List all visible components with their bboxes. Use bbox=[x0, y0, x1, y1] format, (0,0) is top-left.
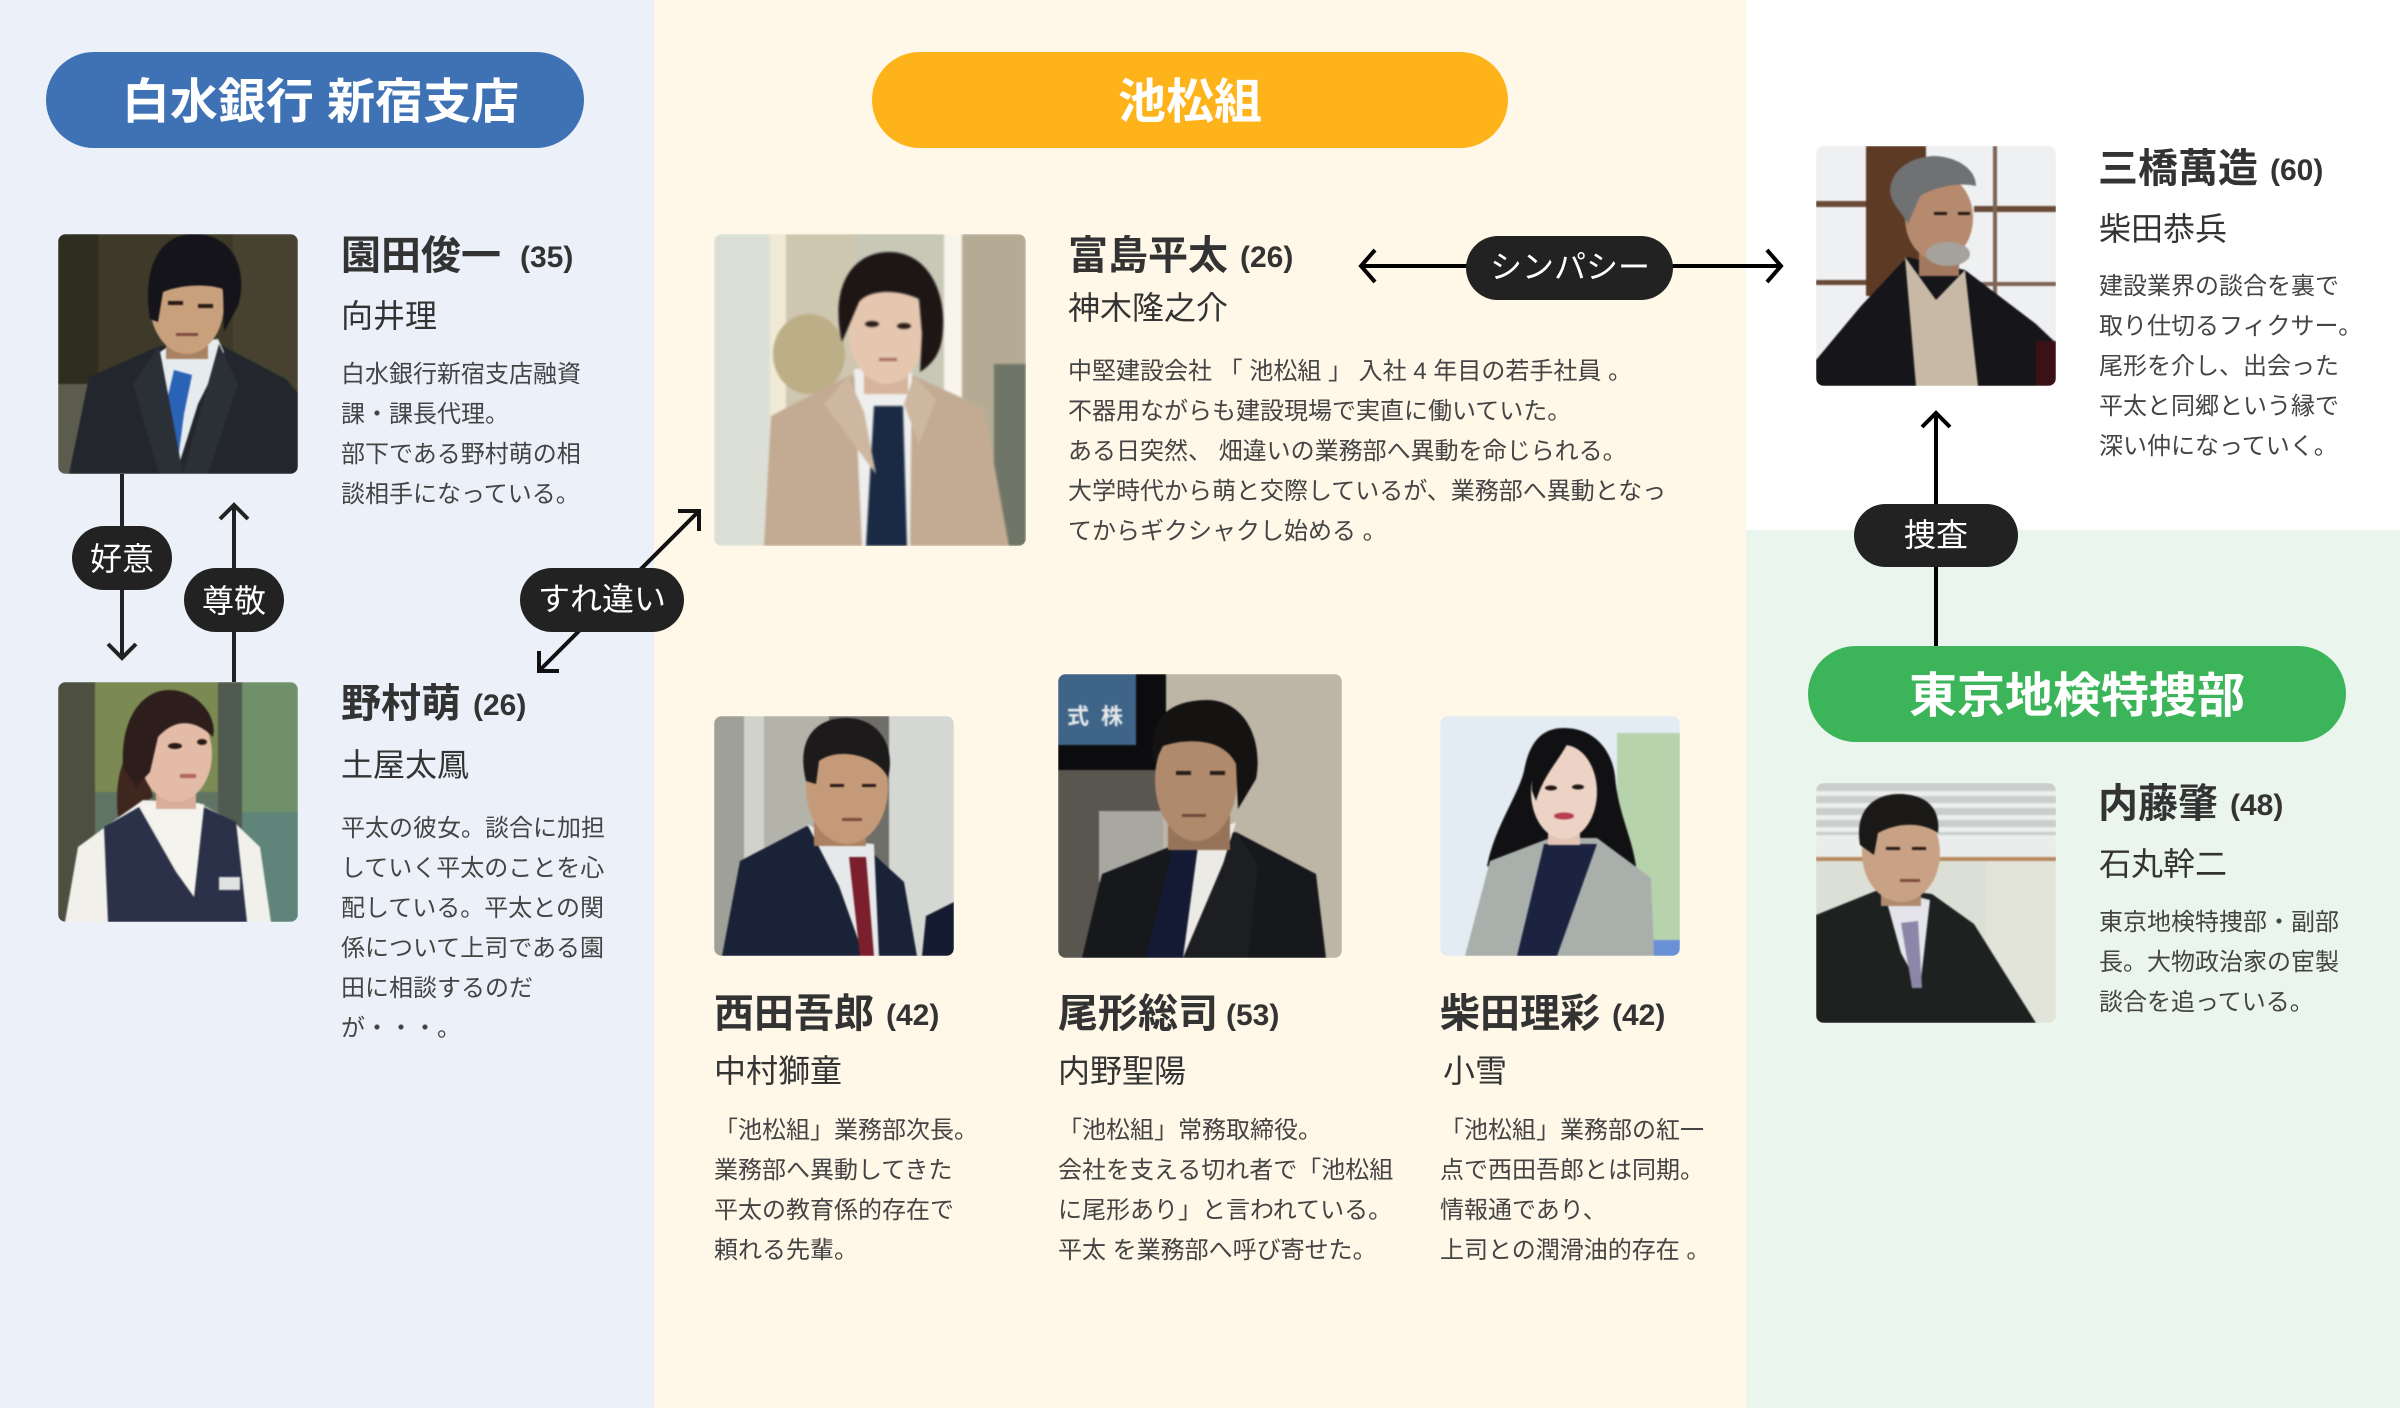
actor: 土屋太鳳: 土屋太鳳 bbox=[341, 747, 469, 783]
description: 尾形総司: に尾形あり」と言われている。 bbox=[1058, 1197, 1392, 1224]
description: 三橋萬造: 建設業界の談合を裏で bbox=[2099, 273, 2339, 300]
photo: 内藤肇 bbox=[1816, 783, 2056, 1023]
name: 富島平太: 富島平太 (26) bbox=[1068, 234, 1293, 278]
photo: 野村萌 bbox=[58, 682, 298, 922]
description: 尾形総司: 会社を支える切れ者で「池松組 bbox=[1058, 1157, 1393, 1184]
panel: 池松組 background bbox=[654, 0, 1746, 1408]
photo: 三橋萬造 bbox=[1816, 146, 2056, 386]
description: 尾形総司: 平太 を業務部へ呼び寄せた。 bbox=[1058, 1237, 1377, 1264]
photo: 尾形総司: 式 bbox=[1067, 704, 1089, 729]
description: 柴田理彩: 「池松組」業務部の紅一 bbox=[1440, 1117, 1704, 1144]
description: 三橋萬造 bbox=[2099, 273, 2362, 460]
description: 富島平太: ある日突然、 畑違いの業務部へ異動を命じられる。 bbox=[1068, 438, 1627, 465]
description: 野村萌: 田に相談するのだ bbox=[341, 975, 533, 1002]
description: 柴田理彩: 点で西田吾郎とは同期。 bbox=[1440, 1157, 1704, 1184]
panel: 白水銀行 background bbox=[0, 0, 654, 1408]
relation: シンパシー arrow: シンパシー bbox=[1490, 249, 1650, 285]
relation: 好意 arrow: 好意 bbox=[90, 541, 154, 577]
description: 三橋萬造: 取り仕切るフィクサー。 bbox=[2099, 313, 2362, 340]
actor: 石丸幹二: 石丸幹二 bbox=[2099, 846, 2227, 882]
photo: 富島平太 bbox=[714, 234, 1026, 546]
card: 園田俊一 bbox=[58, 234, 581, 508]
description: 内藤肇: 長。大物政治家の宦製 bbox=[2099, 949, 2339, 976]
heading: 東京地検特捜部: 東京地検特捜部 bbox=[1909, 670, 2245, 723]
relation: 尊敬 arrow: 尊敬 bbox=[202, 583, 266, 619]
actor: 神木隆之介: 神木隆之介 bbox=[1068, 290, 1228, 326]
description: 野村萌: 係について上司である園 bbox=[341, 935, 604, 962]
description: 園田俊一: 白水銀行新宿支店融資 bbox=[341, 361, 581, 388]
description: 西田吾郎: 業務部へ異動してきた bbox=[714, 1157, 953, 1184]
description: 野村萌: 平太の彼女。談合に加担 bbox=[341, 815, 605, 842]
actor: 柴田恭兵: 柴田恭兵 bbox=[2099, 211, 2227, 247]
description: 内藤肇 bbox=[2099, 909, 2339, 1016]
name: 柴田理彩: 柴田理彩 (42) bbox=[1440, 992, 1665, 1036]
description: 西田吾郎 bbox=[714, 1117, 978, 1264]
description: 園田俊一 bbox=[341, 361, 581, 508]
description: 野村萌 bbox=[341, 815, 605, 1042]
description: 富島平太: てからギクシャクし始める 。 bbox=[1068, 518, 1387, 545]
description: 野村萌: が・・・。 bbox=[341, 1015, 461, 1042]
description: 園田俊一: 課・課長代理。 bbox=[341, 401, 509, 428]
actor: 中村獅童: 中村獅童 bbox=[714, 1053, 842, 1089]
description: 内藤肇: 談合を追っている。 bbox=[2099, 989, 2314, 1016]
name: 三橋萬造: 三橋萬造 (60) bbox=[2098, 147, 2323, 191]
relation: 好意 arrow bbox=[72, 474, 172, 658]
card: 尾形総司 bbox=[1058, 674, 1393, 1264]
heading: 池松組: 池松組 bbox=[1118, 76, 1262, 129]
description: 富島平太: 大学時代から萌と交際しているが、業務部へ異動となっ bbox=[1068, 478, 1666, 505]
photo: 園田俊一 bbox=[58, 234, 298, 474]
card: 柴田理彩 bbox=[1440, 716, 1710, 1264]
description: 柴田理彩: 情報通であり、 bbox=[1440, 1197, 1607, 1224]
description: 三橋萬造: 平太と同郷という縁で bbox=[2099, 393, 2339, 420]
description: 柴田理彩: 上司との潤滑油的存在 。 bbox=[1440, 1237, 1710, 1264]
heading: 東京地検特捜部 bbox=[1808, 646, 2346, 742]
description: 野村萌: 配している。平太との関 bbox=[341, 895, 604, 922]
photo: 柴田理彩 bbox=[1440, 716, 1680, 956]
photo: 尾形総司: 株 bbox=[1101, 704, 1123, 729]
name: 園田俊一: 園田俊一 (35) bbox=[341, 234, 573, 278]
card: 三橋萬造 bbox=[1816, 146, 2362, 460]
description: 野村萌: していく平太のことを心 bbox=[341, 855, 604, 882]
description: 園田俊一: 談相手になっている。 bbox=[341, 481, 580, 508]
description: 尾形総司: 「池松組」常務取締役。 bbox=[1058, 1117, 1322, 1144]
card: 西田吾郎 bbox=[714, 716, 978, 1264]
description: 西田吾郎: 「池松組」業務部次長。 bbox=[714, 1117, 978, 1144]
description: 西田吾郎: 頼れる先輩。 bbox=[714, 1237, 858, 1264]
heading: 白水銀行 新宿支店 bbox=[46, 52, 584, 148]
description: 西田吾郎: 平太の教育係的存在で bbox=[714, 1197, 954, 1224]
description: 内藤肇: 東京地検特捜部・副部 bbox=[2099, 909, 2339, 936]
heading: 白水銀行 新宿支店: 白水銀行 新宿支店 bbox=[122, 76, 519, 129]
card: 野村萌 bbox=[58, 682, 605, 1042]
panel: 東京地検特捜部 background bbox=[1746, 530, 2400, 1408]
relation: すれ違い arrow bbox=[520, 511, 699, 671]
name: 野村萌: 野村萌 (26) bbox=[341, 682, 526, 726]
name: 内藤肇: 内藤肇 (48) bbox=[2098, 782, 2283, 826]
card: 内藤肇 bbox=[1816, 782, 2339, 1023]
description: 三橋萬造: 深い仲になっていく。 bbox=[2099, 433, 2338, 460]
relation: 尊敬 arrow bbox=[184, 505, 284, 682]
name: 西田吾郎: 西田吾郎 (42) bbox=[714, 992, 939, 1036]
description: 園田俊一: 部下である野村萌の相 bbox=[341, 441, 581, 468]
photo: 西田吾郎 bbox=[714, 716, 954, 956]
relation: 捜査 arrow: 捜査 bbox=[1904, 517, 1968, 553]
actor: 小雪: 小雪 bbox=[1443, 1053, 1507, 1089]
heading: 池松組 bbox=[872, 52, 1508, 148]
photo: 尾形総司 bbox=[1058, 674, 1342, 958]
actor: 内野聖陽: 内野聖陽 bbox=[1058, 1053, 1186, 1089]
relation: すれ違い arrow: すれ違い bbox=[538, 581, 666, 617]
relation: シンパシー arrow bbox=[1361, 236, 1781, 300]
card: 富島平太 bbox=[714, 234, 1666, 546]
relation: 捜査 arrow bbox=[1854, 413, 2018, 646]
description: 柴田理彩 bbox=[1440, 1117, 1710, 1264]
description: 富島平太 bbox=[1068, 358, 1666, 545]
description: 富島平太: 不器用ながらも建設現場で実直に働いていた。 bbox=[1068, 398, 1571, 425]
description: 尾形総司 bbox=[1058, 1117, 1393, 1264]
description: 富島平太: 中堅建設会社 「 池松組 」 入社 4 年目の若手社員 。 bbox=[1068, 358, 1632, 385]
name: 尾形総司: 尾形総司 (53) bbox=[1058, 992, 1279, 1036]
actor: 向井理: 向井理 bbox=[341, 298, 437, 334]
description: 三橋萬造: 尾形を介し、出会った bbox=[2099, 353, 2339, 380]
